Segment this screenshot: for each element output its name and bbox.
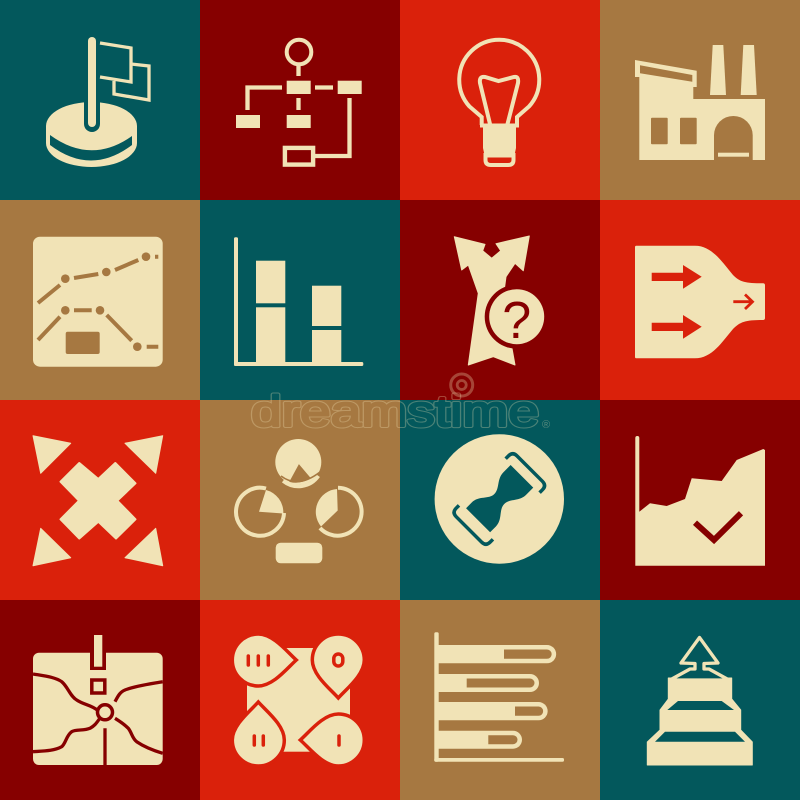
panel: map: [0, 600, 200, 800]
panel: hourglass: [400, 400, 600, 600]
icon: area chart with check: [635, 436, 765, 566]
icon: line chart card: [33, 237, 163, 367]
icon: factory: [635, 45, 765, 160]
icon: flag on round base: [46, 41, 149, 167]
panel: factory: [600, 0, 800, 200]
icon: map with roads and marker: [33, 635, 163, 765]
panel: line chart card: [0, 200, 200, 400]
panel: funnel bottleneck: [600, 200, 800, 400]
watermark: [250, 372, 550, 428]
icon: flowchart diagram: [236, 40, 362, 165]
panel: expand cross: [0, 400, 200, 600]
watermark: ®: [542, 419, 550, 431]
icon: three pie charts with label: [236, 439, 362, 563]
panel: pyramid with arrow: [600, 600, 800, 800]
icon: stepped pyramid with arrow: [647, 638, 752, 765]
icon: split arrows with question badge: ?: [502, 292, 531, 350]
icon: split arrows with question badge: [454, 236, 549, 365]
icon: numbered drops around square: [232, 634, 364, 766]
panel: horizontal bar chart: [400, 600, 600, 800]
icon: horizontal progress bars: [434, 632, 564, 762]
icon: light bulb: [459, 40, 539, 165]
icon: hourglass in circle: [435, 434, 564, 564]
icon: cross with corner arrows: [33, 436, 163, 566]
icon: bottleneck with arrows: [635, 246, 765, 358]
panel: flag on disc: [0, 0, 200, 200]
panel: four pins around square: [200, 600, 400, 800]
panel: area chart: [600, 400, 800, 600]
icon: stacked bar chart: [234, 237, 363, 366]
panel: stacked bar chart: [200, 200, 400, 400]
panel: light bulb: [400, 0, 600, 200]
panel: flowchart: [200, 0, 400, 200]
panel: road sign with question: [400, 200, 600, 400]
panel: three pie charts: [200, 400, 400, 600]
